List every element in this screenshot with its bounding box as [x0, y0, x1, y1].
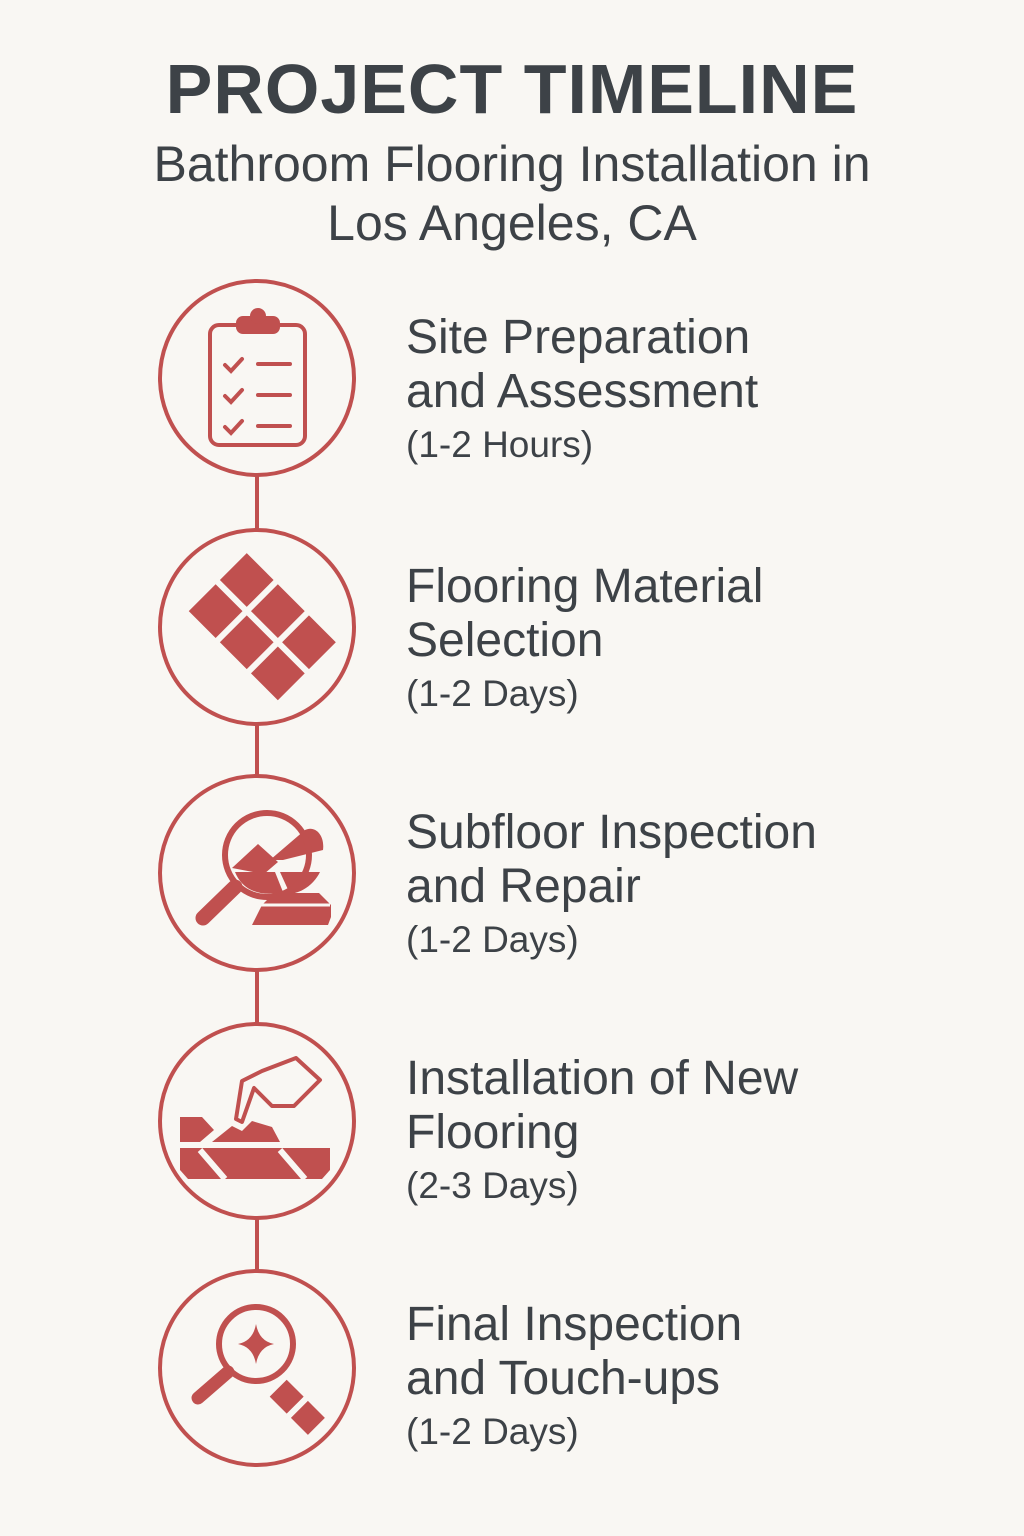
step 1 text: and Assessment	[406, 365, 758, 418]
icon: installing flooring	[160, 1024, 354, 1218]
icon: tiles	[160, 530, 354, 724]
step 3 text	[406, 806, 817, 960]
subtitle	[153, 136, 871, 251]
step 5 text: Final Inspection	[406, 1298, 742, 1351]
step 2 text: Selection	[406, 614, 603, 667]
subtitle: Bathroom Flooring Installation in	[153, 136, 871, 192]
step 4 text: Installation of New	[406, 1052, 798, 1105]
title: PROJECT TIMELINE	[166, 50, 858, 128]
subtitle: Los Angeles, CA	[327, 195, 697, 251]
connector line	[255, 475, 259, 1271]
step 5 text	[406, 1298, 742, 1452]
icon: subfloor inspection	[160, 776, 354, 970]
step 1 text: Site Preparation	[406, 311, 750, 364]
step 4 text: (2-3 Days)	[406, 1165, 579, 1206]
step 4 text	[406, 1052, 798, 1206]
step 3 text: (1-2 Days)	[406, 919, 579, 960]
icon: final inspection	[160, 1271, 354, 1465]
step 2 text: Flooring Material	[406, 560, 763, 613]
step 1 text: (1-2 Hours)	[406, 424, 593, 465]
step 3 text: Subfloor Inspection	[406, 806, 817, 859]
step 1 text	[406, 311, 758, 465]
step 4 text: Flooring	[406, 1106, 579, 1159]
step 5 text: and Touch-ups	[406, 1352, 720, 1405]
icon: clipboard	[160, 281, 354, 475]
step 5 text: (1-2 Days)	[406, 1411, 579, 1452]
step 2 text: (1-2 Days)	[406, 673, 579, 714]
step 2 text	[406, 560, 763, 714]
step 3 text: and Repair	[406, 860, 641, 913]
